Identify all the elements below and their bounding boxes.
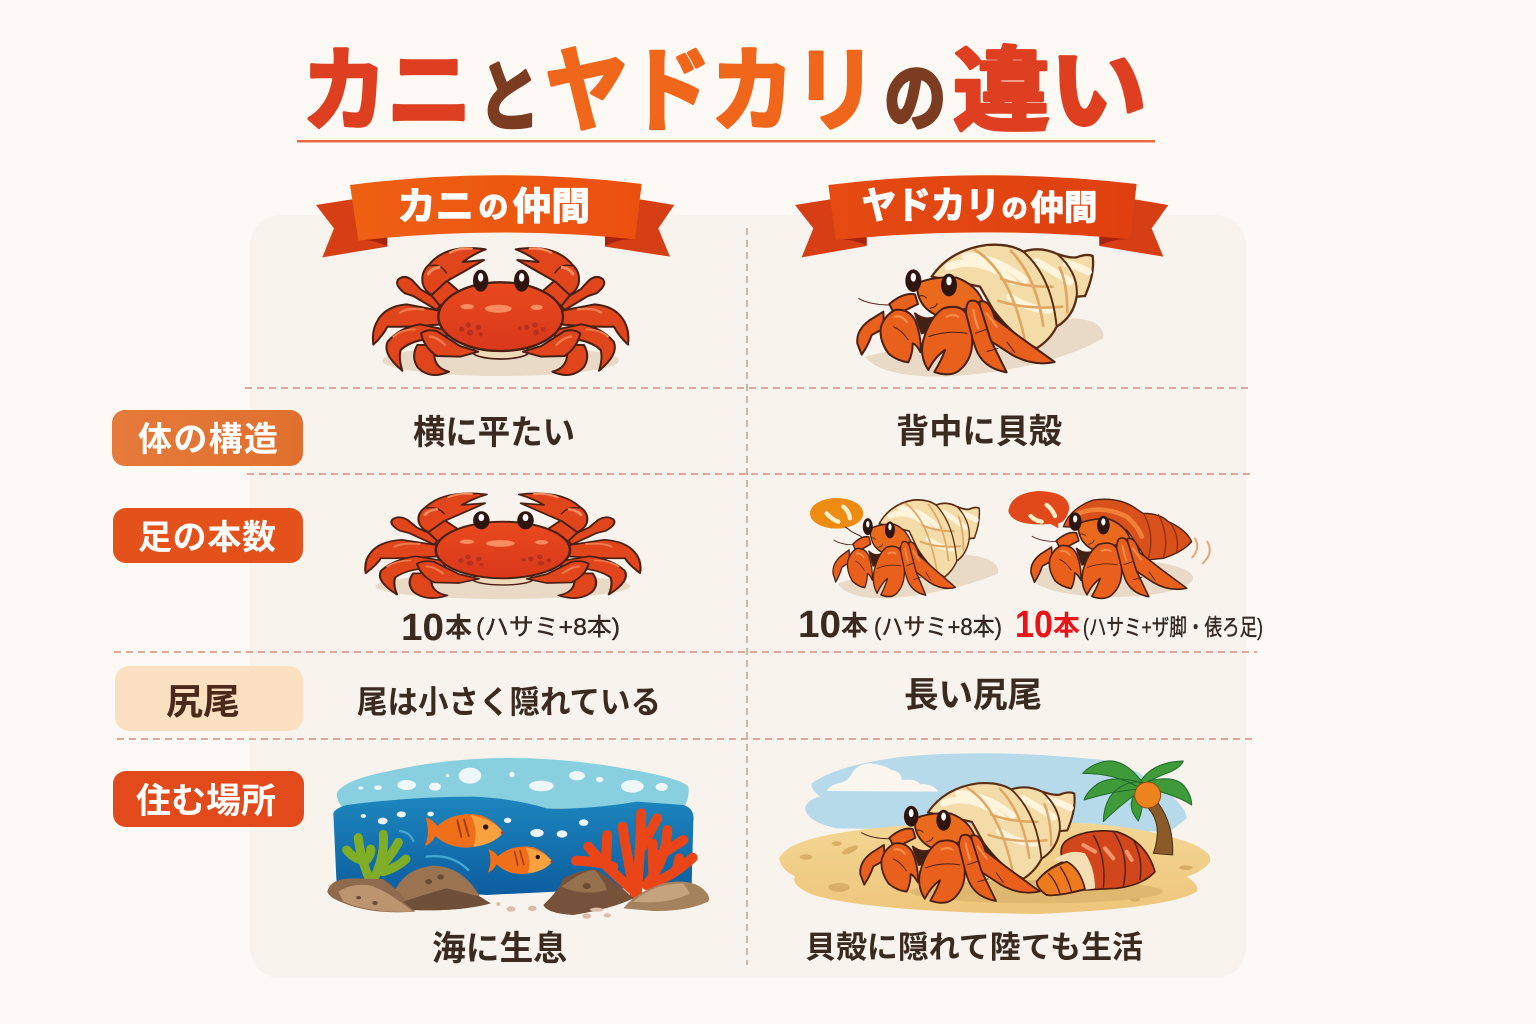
large fish bbox=[425, 814, 504, 848]
icon: red speech bubble bbox=[1008, 491, 1069, 528]
text: crab body: 横に平たい bbox=[413, 414, 575, 452]
sea bbox=[333, 797, 694, 895]
text: shell-less hermit leg count bbox=[1015, 604, 1263, 646]
text: crab leg count: 本 bbox=[445, 613, 472, 643]
text: hermit leg count bbox=[798, 604, 1002, 646]
text: crab tail: 尾は小さく隠れている bbox=[357, 684, 661, 720]
icon: crab bbox=[373, 248, 628, 376]
empty shell bbox=[1037, 831, 1155, 895]
seabed pebbles bbox=[496, 902, 611, 919]
icon: small hermit crab with shell bbox=[833, 500, 998, 598]
text: hermit leg count: 10 bbox=[798, 604, 841, 646]
table dividers bbox=[114, 228, 1257, 965]
icon: hermit crab on beach bbox=[860, 783, 1075, 903]
row label: tail bbox=[115, 666, 303, 731]
small fish bbox=[488, 847, 553, 874]
text: crab leg count bbox=[401, 607, 620, 649]
text: hermit crab body: 背中に貝殻 bbox=[896, 413, 1062, 451]
row label: tail: 尻尾 bbox=[166, 681, 240, 722]
banner: crab group: カニ bbox=[397, 186, 474, 228]
bubbles bbox=[358, 768, 668, 838]
row label: habitat: 住む場所 bbox=[136, 782, 276, 821]
panel: comparison table bbox=[250, 215, 1246, 978]
banner: hermit crab group: ヤドカリ bbox=[862, 185, 1000, 227]
text: shell-less hermit leg count: 10 bbox=[1015, 604, 1053, 646]
text: shell-less hermit leg count: 本 bbox=[1053, 611, 1080, 641]
text: shell-less hermit leg count: (ハサミ+ザ脚・俵ろ足) bbox=[1083, 614, 1263, 640]
row label: body structure bbox=[112, 410, 303, 466]
banner: crab group bbox=[316, 175, 674, 257]
title: ヤドカリ bbox=[545, 41, 877, 143]
coral bbox=[576, 813, 693, 895]
text: hermit leg count: 本 bbox=[841, 611, 868, 641]
banner: hermit crab group: の bbox=[1002, 193, 1028, 223]
sky bbox=[805, 753, 1187, 832]
banner: crab group: 仲間 bbox=[513, 186, 590, 228]
row label: number of legs: 足の本数 bbox=[138, 519, 276, 557]
icon: crab flat bbox=[365, 493, 641, 599]
text: hermit leg count: (ハサミ+8本) bbox=[874, 614, 1002, 641]
text: crab leg count: (ハサミ+8本) bbox=[476, 614, 620, 641]
row label: habitat bbox=[113, 771, 304, 827]
icon: orange speech bubble bbox=[810, 498, 863, 537]
banner: crab group: の bbox=[478, 191, 508, 224]
text: hermit crab tail: 長い尻尾 bbox=[904, 676, 1042, 715]
seaweed bbox=[347, 834, 406, 877]
sand bbox=[779, 822, 1210, 914]
banner: hermit crab group: 仲間 bbox=[1031, 189, 1097, 227]
row label: number of legs bbox=[113, 508, 303, 563]
banner: hermit crab group bbox=[795, 175, 1168, 257]
title: カニ bbox=[302, 41, 472, 143]
title: と bbox=[478, 56, 540, 141]
cloud bbox=[827, 763, 938, 792]
title: 違い bbox=[953, 41, 1147, 143]
title: の bbox=[884, 57, 946, 140]
text: crab leg count: 10 bbox=[401, 607, 444, 649]
text: hermit crab habitat: 貝殻に隠れて陸ても生活 bbox=[805, 930, 1143, 965]
rocks bbox=[327, 878, 415, 912]
text: crab habitat: 海に生息 bbox=[432, 930, 567, 968]
row label: body structure: 体の構造 bbox=[138, 421, 278, 459]
icon: hermit crab bbox=[857, 245, 1103, 377]
icon: hermit crab without shell bbox=[1031, 499, 1210, 598]
sky band bbox=[337, 758, 689, 808]
title bbox=[297, 41, 1155, 143]
palm tree bbox=[1083, 761, 1192, 855]
illustration: ocean bbox=[327, 758, 709, 919]
shadow bbox=[910, 880, 1163, 903]
illustration: beach bbox=[779, 753, 1210, 914]
